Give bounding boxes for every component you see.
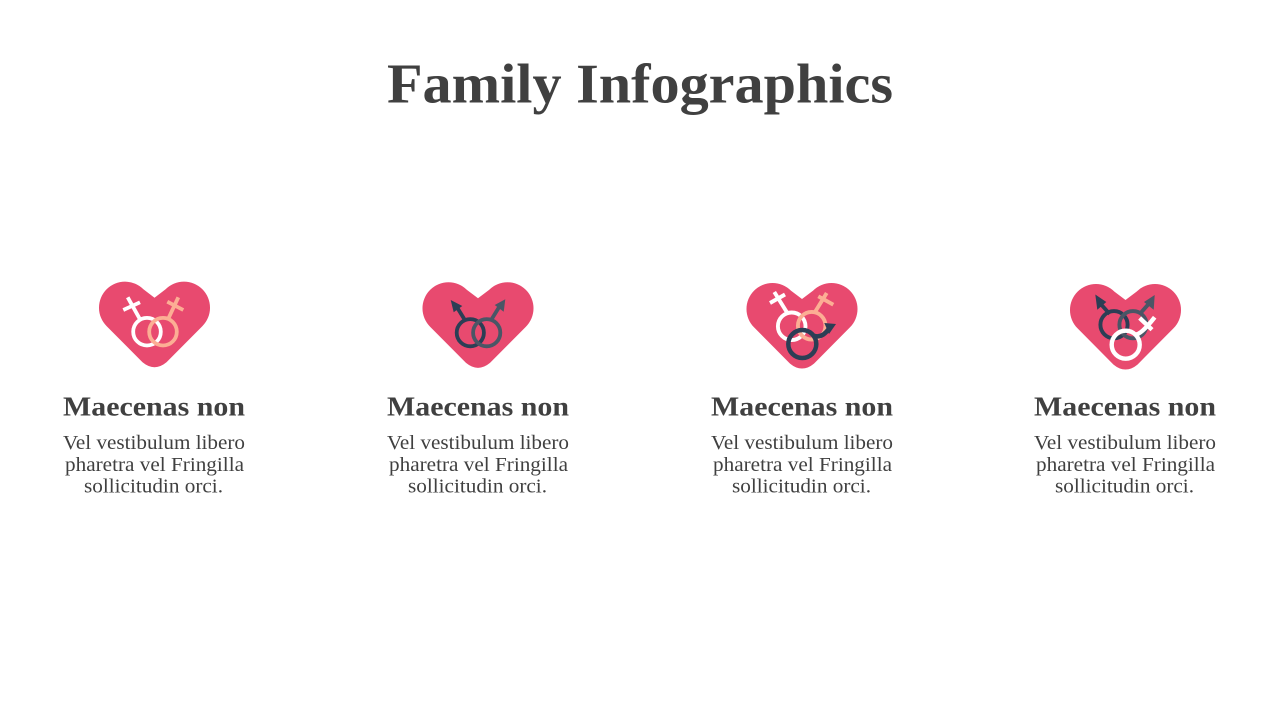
text block: pharetra vel Fringilla <box>1036 454 1215 476</box>
text block: pharetra vel Fringilla <box>65 454 244 476</box>
text block: pharetra vel Fringilla <box>389 454 568 476</box>
panel: column 4 <box>1034 284 1216 498</box>
panel: column 1 <box>63 282 245 498</box>
text block: sollicitudin orci. <box>408 476 547 498</box>
text block: Vel vestibulum libero <box>63 432 245 454</box>
text block: Vel vestibulum libero <box>387 432 569 454</box>
panel: column 3 <box>711 283 893 498</box>
text block <box>1034 432 1216 498</box>
text block <box>387 432 569 498</box>
text block <box>63 432 245 498</box>
heading: Maecenas non <box>387 392 569 422</box>
text block <box>711 432 893 498</box>
icon: heart with two male symbols and one female symbol <box>1070 284 1181 370</box>
title: Family Infographics <box>387 54 893 116</box>
heading: Maecenas non <box>63 392 245 422</box>
icon: heart with two male symbols <box>422 282 534 368</box>
text block: Vel vestibulum libero <box>1034 432 1216 454</box>
text block: sollicitudin orci. <box>84 476 223 498</box>
panel: column 2 <box>387 282 569 498</box>
heading: Maecenas non <box>1034 392 1216 422</box>
heading: Maecenas non <box>711 392 893 422</box>
icon: heart with two female symbols <box>99 282 210 367</box>
icon: heart with two female symbols and one male symbol <box>746 283 858 369</box>
text block: sollicitudin orci. <box>1055 476 1194 498</box>
text block: pharetra vel Fringilla <box>713 454 892 476</box>
text block: sollicitudin orci. <box>732 476 871 498</box>
text block: Vel vestibulum libero <box>711 432 893 454</box>
